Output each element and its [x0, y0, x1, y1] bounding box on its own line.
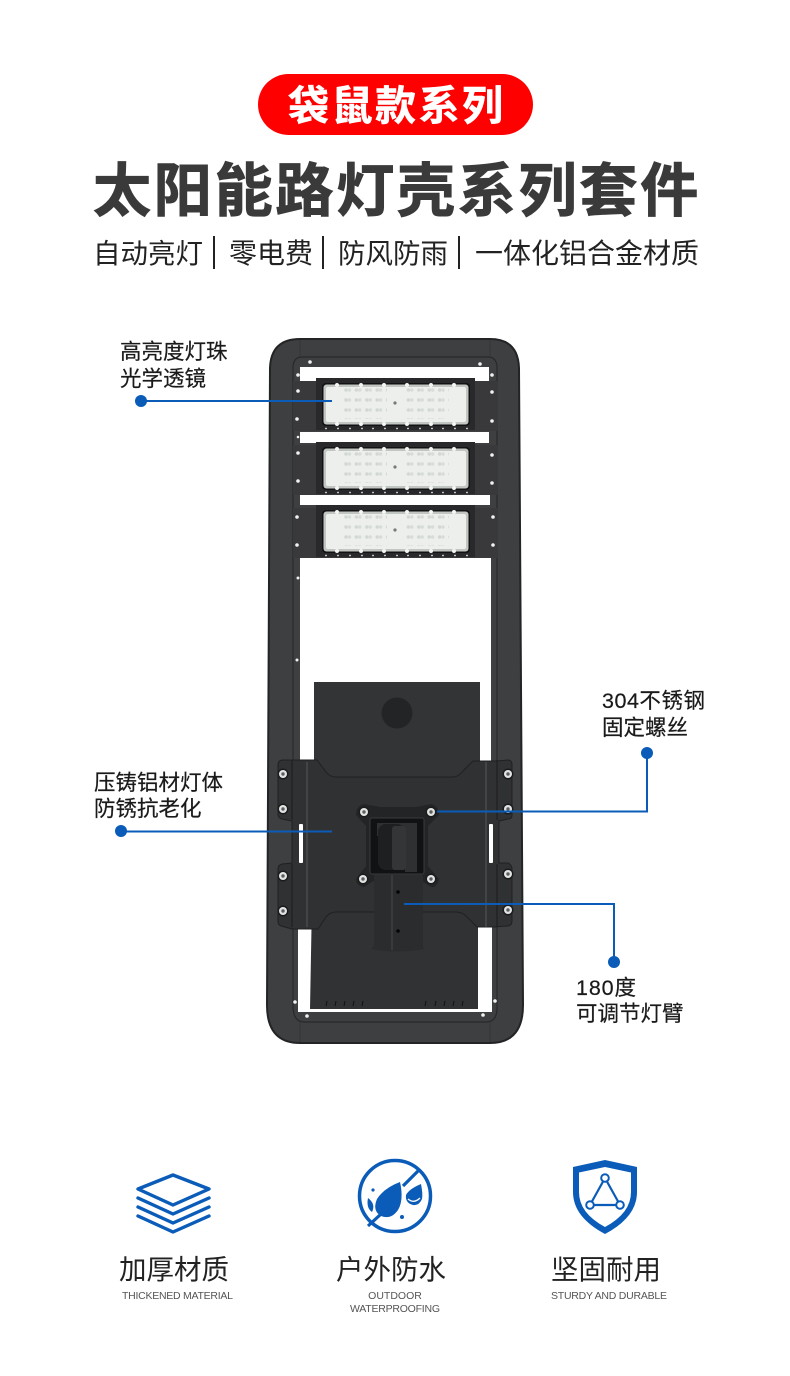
feature: outdoor waterproofing: [336, 1160, 446, 1315]
upper solar plate: [314, 682, 480, 790]
mounting bracket: [278, 760, 512, 929]
callout: stainless screws: 固定螺丝: [602, 716, 688, 740]
subtitle: feature list: [93, 236, 699, 269]
callout: LED lens: [120, 340, 332, 407]
feature: sturdy and durable: STURDY AND DURABLE: [551, 1290, 667, 1302]
subtitle: feature list: 防风防雨: [338, 238, 448, 269]
feature: sturdy and durable: 坚固耐用: [551, 1254, 661, 1285]
badge: series pill: [258, 74, 533, 135]
LED module 3: [293, 505, 498, 558]
window openings: [298, 367, 492, 1012]
bracket screws: [278, 768, 514, 916]
feature: sturdy and durable: [551, 1160, 667, 1302]
icon: shield: [573, 1160, 637, 1234]
LED module 2: [293, 442, 498, 495]
callout: die-cast body: 防锈抗老化: [94, 797, 202, 821]
icon: no water: [360, 1160, 430, 1232]
side slots: [299, 824, 493, 863]
callout: adjustable arm: 可调节灯臂: [576, 1002, 684, 1026]
sensor hole: [382, 698, 412, 728]
subtitle: feature list: 自动亮灯: [93, 238, 203, 269]
icon: layers: [138, 1175, 209, 1232]
subtitle: feature list: 一体化铝合金材质: [475, 238, 699, 269]
feature: thickened material: THICKENED MATERIAL: [122, 1290, 233, 1302]
frame screws: [293, 360, 497, 1018]
LED module 1: [293, 378, 498, 431]
callout: stainless screws: 304不锈钢: [602, 689, 705, 713]
hinge: [377, 823, 417, 872]
callout: LED lens: 高亮度灯珠: [120, 340, 228, 364]
arm mount plate: [356, 804, 439, 887]
mount screws: [358, 806, 436, 884]
callout: adjustable arm: 180度: [576, 976, 636, 1000]
lower solar plate: [310, 900, 478, 1009]
callout: LED lens: 光学透镜: [120, 367, 206, 391]
adjustable arm: [371, 875, 424, 952]
callout: stainless screws: [437, 689, 705, 812]
title: 太阳能路灯壳系列套件: [93, 159, 701, 224]
feature: outdoor waterproofing: OUTDOOR: [368, 1290, 422, 1302]
feature: outdoor waterproofing: WATERPROOFING: [350, 1303, 440, 1315]
callout: die-cast body: [94, 771, 332, 837]
callout: adjustable arm: [404, 904, 684, 1026]
vent marks: [326, 1001, 463, 1006]
badge: series pill: 袋鼠款系列: [288, 83, 506, 129]
feature: outdoor waterproofing: 户外防水: [336, 1254, 446, 1285]
lamp frame: [267, 339, 523, 1043]
product: solar street light housing: [267, 339, 523, 1043]
callout: die-cast body: 压铸铝材灯体: [94, 771, 223, 795]
subtitle: feature list: 零电费: [229, 238, 313, 269]
feature: thickened material: 加厚材质: [119, 1254, 229, 1285]
feature: thickened material: [119, 1175, 233, 1302]
